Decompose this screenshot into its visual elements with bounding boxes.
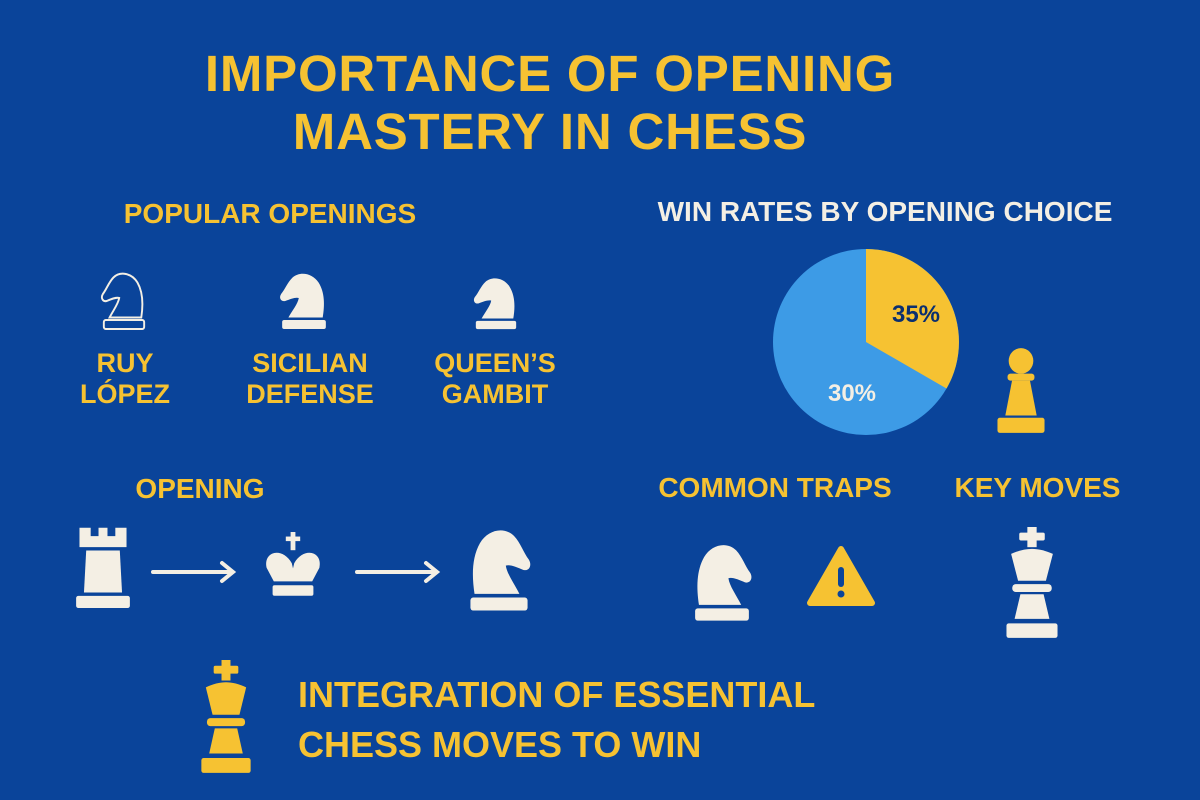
icon: king key moves [1006,527,1058,638]
heading: popular openings: POPULAR OPENINGS [124,198,416,229]
label: sicilian defense: DEFENSE [246,379,374,409]
pie chart [773,249,959,435]
pie chart: 30% [828,380,876,407]
icon: king gold [201,660,251,773]
bottom text [298,674,815,765]
title [205,45,895,160]
icon: warning [807,546,875,606]
icon: knight traps [695,545,752,621]
bottom text: CHESS MOVES TO WIN [298,724,701,765]
title: MASTERY IN CHESS [293,103,807,160]
heading: win rates: WIN RATES BY OPENING CHOICE [658,196,1112,227]
label: queens gambit: QUEEN’S [434,348,556,378]
label: sicilian defense: SICILIAN [252,348,368,378]
label: queens gambit: GAMBIT [442,379,548,409]
icon: pawn [997,348,1045,433]
icon: knight [470,530,530,610]
label: ruy lopez: LÓPEZ [80,379,170,409]
heading: common traps: COMMON TRAPS [658,472,892,503]
icon: rook [76,528,130,608]
label: ruy lopez [80,348,170,409]
label: ruy lopez: RUY [96,348,154,378]
arrow 1 [151,560,236,584]
title: IMPORTANCE OF OPENING [205,45,895,102]
icon: knight queens gambit [474,278,516,330]
bottom text: INTEGRATION OF ESSENTIAL [298,674,815,715]
arrow 2 [355,560,440,584]
heading: key moves: KEY MOVES [954,472,1120,503]
label: queens gambit [434,348,556,409]
label: sicilian defense [246,348,374,409]
panel: popular openings [80,198,556,409]
icon: king [266,532,320,596]
icon: knight sicilian [280,274,326,329]
icon: knight ruy lopez (outline) [100,272,146,330]
pie chart: 35% [892,301,940,328]
heading: opening: OPENING [135,473,265,504]
